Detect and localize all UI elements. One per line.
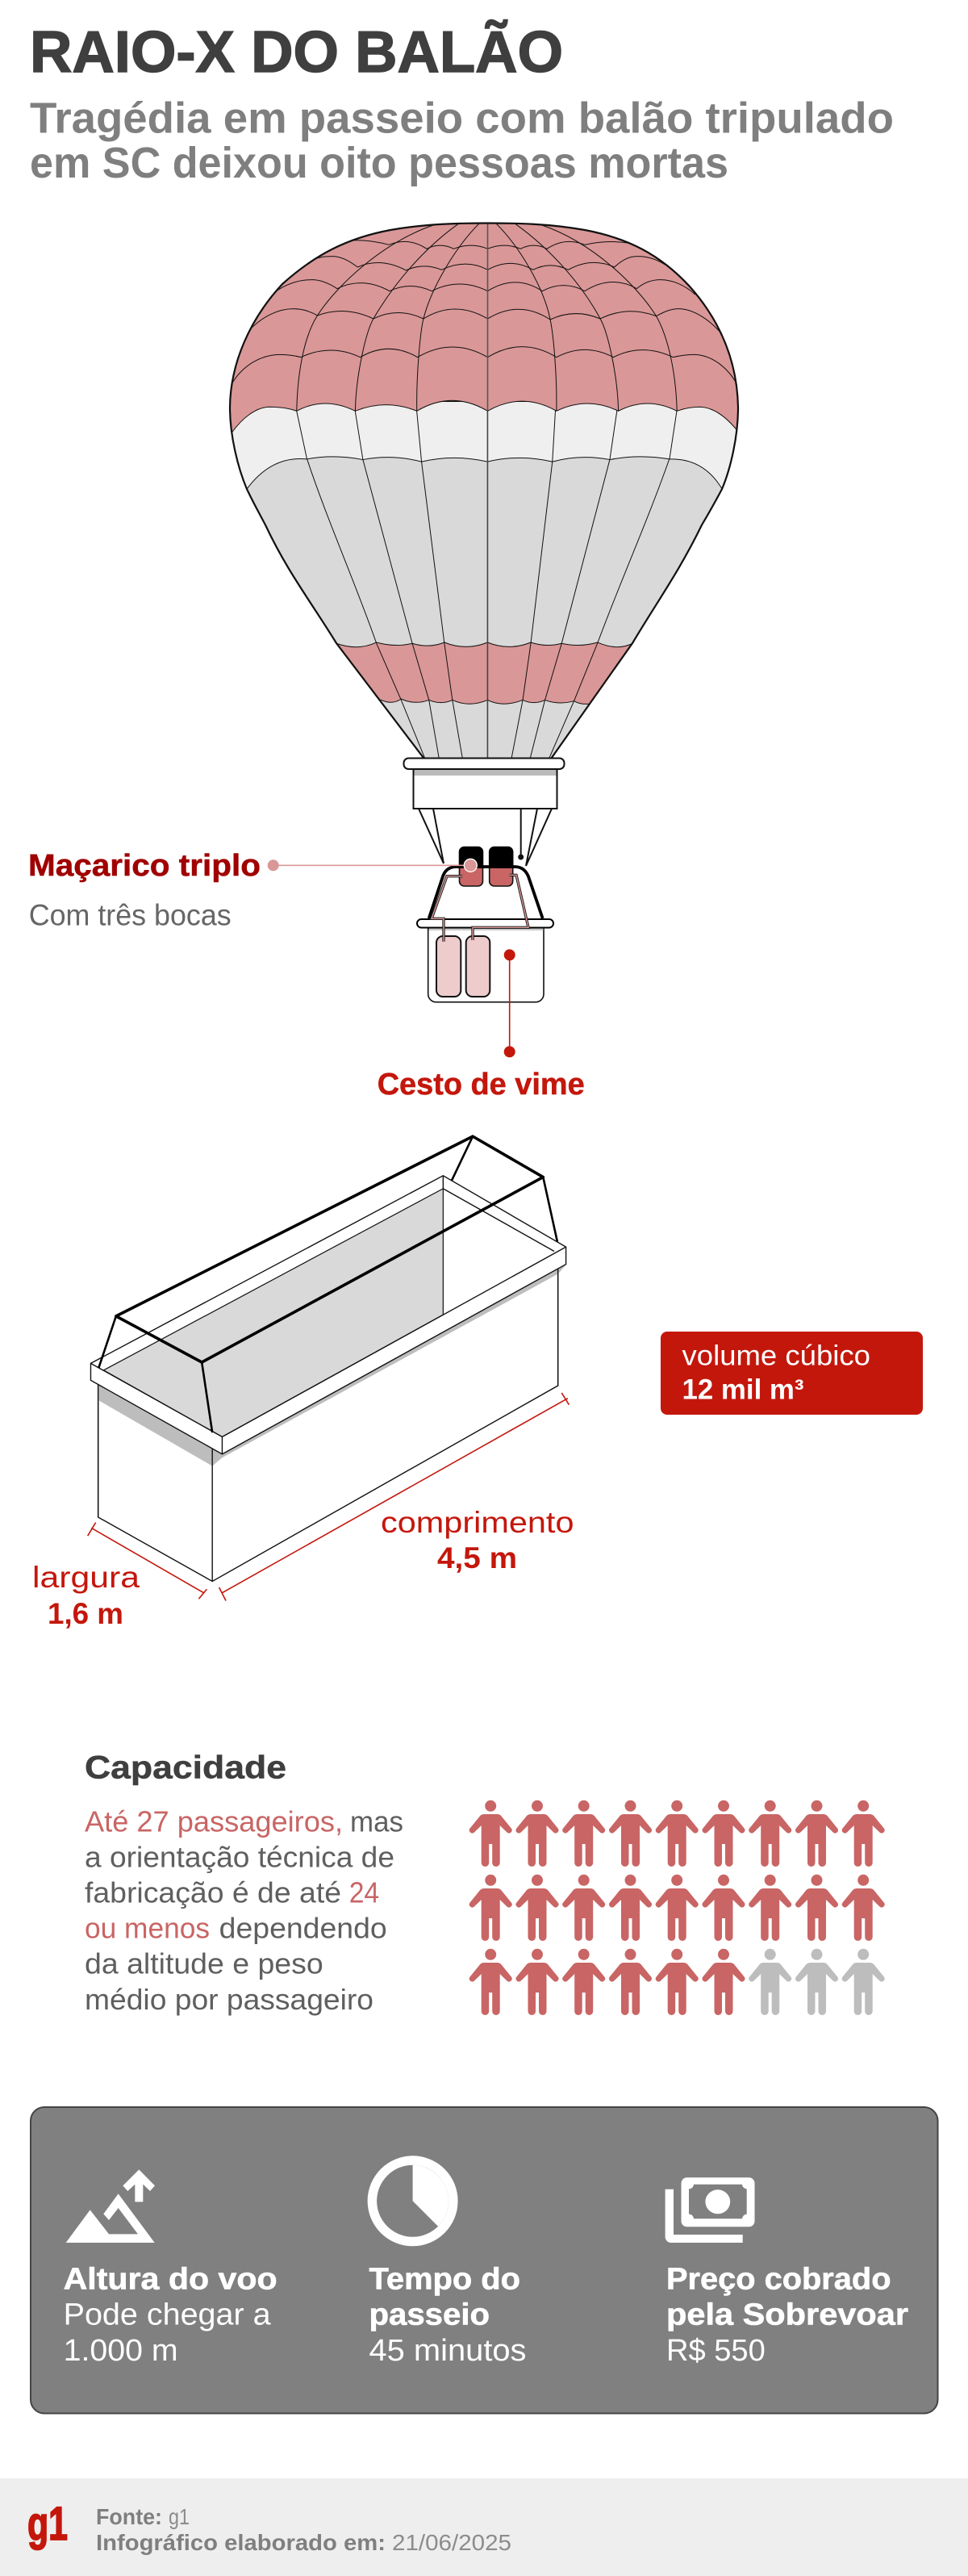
label: largura: 1,6 m (48, 1597, 123, 1630)
burner frame outline (98, 1136, 557, 1432)
text block: capacidade: ou menos (85, 1912, 210, 1945)
basket body (98, 1269, 558, 1581)
text: altura do voo: Altura do voo (64, 2263, 277, 2297)
subtitle: em SC deixou oito pessoas mortas (30, 139, 728, 187)
label: comprimento: 4,5 m (437, 1541, 517, 1574)
diagram: basket isometric (88, 1136, 569, 1601)
illustration: burner frame (429, 867, 543, 918)
text block: capacidade: dependendo (219, 1912, 387, 1945)
text: preço cobrado: R$ 550 (666, 2334, 766, 2368)
text: altura do voo (64, 2263, 277, 2368)
subtitle: Tragédia em passeio com balão tripulado (30, 94, 894, 142)
text block: capacidade: a orientação técnica de (85, 1840, 394, 1873)
text block: capacidade: médio por passageiro (85, 1983, 373, 2016)
pictogram: 27 passengers (469, 1800, 885, 2015)
callout: maçarico pointer (268, 859, 477, 872)
illustration: wicker basket (417, 919, 553, 1002)
source text: Infográfico elaborado em: (96, 2530, 386, 2555)
illustration: balloon envelope (229, 222, 739, 757)
basket rim shadow (98, 1265, 566, 1466)
text block: capacidade: 24 (349, 1876, 379, 1909)
icon: mountain altitude (66, 2169, 155, 2243)
length dimension (219, 1393, 569, 1601)
illustration: burners (460, 847, 513, 886)
callout: cesto label: Cesto de vime (378, 1068, 585, 1102)
label: largura: largura (32, 1561, 140, 1594)
icon: clock (368, 2156, 458, 2246)
callout: maçarico label: Com três bocas (29, 899, 232, 932)
logo: g1: g1 (27, 2498, 68, 2550)
heading: capacidade: Capacidade (85, 1750, 286, 1785)
footer (0, 2478, 968, 2576)
text: altura do voo: 1.000 m (64, 2334, 178, 2368)
callout: volume cúbico (661, 1332, 923, 1415)
icon: money (666, 2177, 755, 2243)
callout: maçarico label: Maçarico triplo (28, 849, 261, 883)
label: comprimento (381, 1506, 574, 1574)
source text: g1 (169, 2504, 190, 2529)
callout: volume cúbico: 12 mil m³ (682, 1374, 803, 1406)
text block: capacidade: Até 27 passageiros, (85, 1804, 343, 1838)
illustration: balloon mouth and skirt (403, 759, 565, 809)
text block: capacidade (85, 1804, 403, 2016)
text: preço cobrado: Preço cobrado (666, 2263, 891, 2297)
callout: maçarico label (28, 849, 261, 932)
source text (96, 2504, 511, 2555)
text: preço cobrado (666, 2263, 908, 2368)
callout: cesto pointer (504, 949, 515, 1057)
label: comprimento: comprimento (381, 1506, 574, 1539)
source text: 21/06/2025 (392, 2530, 511, 2555)
illustration: suspension cables (419, 809, 552, 866)
text block: capacidade: fabricação é de até (85, 1876, 341, 1909)
callout: volume cúbico: volume cúbico (682, 1340, 870, 1372)
text: tempo do passeio: passeio (369, 2298, 490, 2332)
text: altura do voo: Pode chegar a (64, 2298, 271, 2332)
label: largura (32, 1561, 140, 1630)
text: preço cobrado: pela Sobrevoar (666, 2298, 908, 2332)
text: tempo do passeio (369, 2263, 526, 2368)
text: tempo do passeio: Tempo do (369, 2263, 520, 2297)
source text: Fonte: (96, 2504, 162, 2529)
basket rim and interior (90, 1176, 566, 1454)
text block: capacidade: da altitude e peso (85, 1947, 323, 1980)
text: tempo do passeio: 45 minutos (369, 2334, 526, 2368)
title: RAIO-X DO BALÃO (30, 19, 563, 85)
panel: flight facts (31, 2107, 937, 2413)
width dimension (88, 1523, 207, 1599)
illustration: gas hoses (432, 875, 528, 942)
subtitle (30, 94, 894, 187)
text block: capacidade: mas (350, 1804, 403, 1838)
